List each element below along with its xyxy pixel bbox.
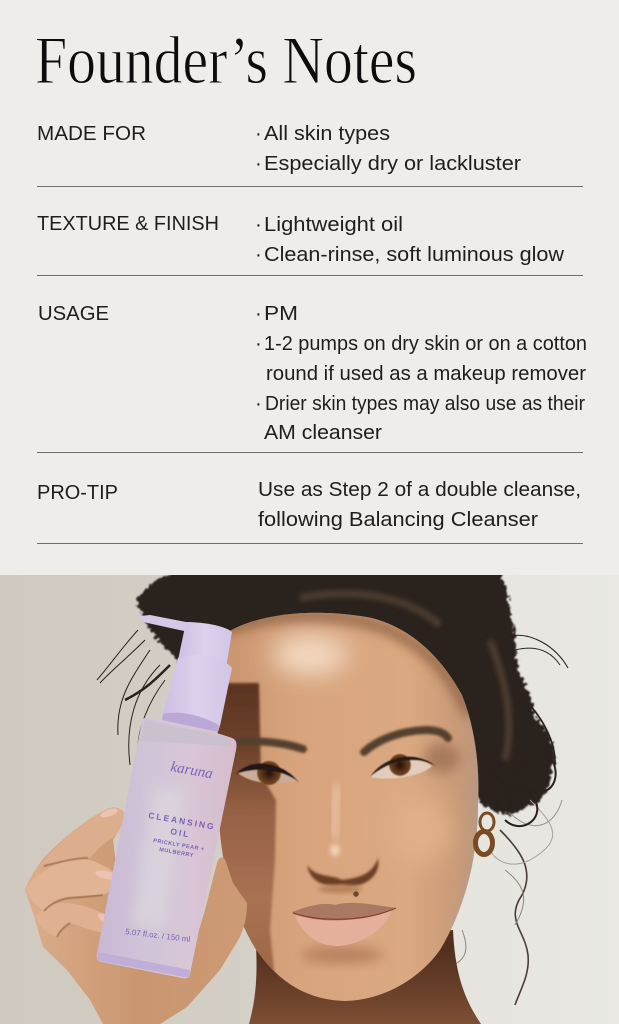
hairline shading [225,616,470,715]
bottle label text: OIL [170,826,191,839]
bottle body [97,718,237,978]
bottle label text: 5.07 fl.oz. / 150 ml [125,927,191,944]
neck [249,930,481,1024]
row: usage: · [255,302,262,325]
nose [307,785,378,893]
row: pro-tip: Use as Step 2 of a double cleanse, [258,478,581,501]
row: pro-tip [37,478,583,544]
pump collar [163,655,232,726]
bottle label text: karuna [169,759,214,782]
row: usage: 1-2 pumps on dry skin or on a cotton [264,332,587,355]
eyebrows [236,730,448,752]
product: cleansing oil bottle [97,615,237,978]
fingernails [95,808,118,922]
right cheek edge light [454,793,478,922]
mole [353,891,359,897]
fingers [26,808,125,937]
eyes [236,754,436,785]
row: made for [37,122,583,186]
bottle label text: PRICKLY PEAR + [153,838,205,853]
row: made for: MADE FOR [37,122,146,145]
row: usage: round if used as a makeup remover [266,362,586,385]
row: made for: · [255,152,262,175]
row: made for: Especially dry or lackluster [264,152,521,175]
chin shadow [300,947,384,963]
earring [476,813,494,854]
row: texture and finish: Lightweight oil [264,213,403,236]
nozzle [140,615,186,631]
photo: model holding cleansing oil bottle [0,570,619,1024]
row: usage [37,302,587,452]
photo backdrop [0,575,548,1024]
row: texture and finish: TEXTURE & FINISH [37,212,219,235]
row: pro-tip: following Balancing Cleanser [258,508,538,531]
row: pro-tip: PRO-TIP [37,481,118,504]
row: texture and finish: Clean-rinse, soft luminous glow [264,243,564,266]
row: usage: · [255,332,262,355]
bottle label text: CLEANSING [148,810,216,832]
notes panel background [0,0,619,575]
row: texture and finish: · [255,243,262,266]
bottle label text: MULBERRY [159,847,194,859]
forehead shine [272,635,348,675]
row: usage: AM cleanser [264,421,382,444]
face [205,613,490,1001]
hair [97,570,568,1005]
temple shading around eye [424,743,460,773]
hand behind bottle [25,807,247,1024]
row: usage: Drier skin types may also use as their [265,392,585,415]
row: usage: · [255,392,262,415]
row: made for: · [255,122,262,145]
pump head [178,622,232,668]
row: texture and finish: · [255,213,262,236]
lips [292,903,396,946]
row: texture and finish [37,212,583,276]
cheek glow [402,803,452,856]
bottle label text [125,759,216,944]
row: usage: USAGE [38,302,109,325]
row: usage: PM [264,302,298,325]
title: Founder’s Notes [35,22,417,98]
row: made for: All skin types [264,122,390,145]
cast shadow of bottle [218,681,278,972]
